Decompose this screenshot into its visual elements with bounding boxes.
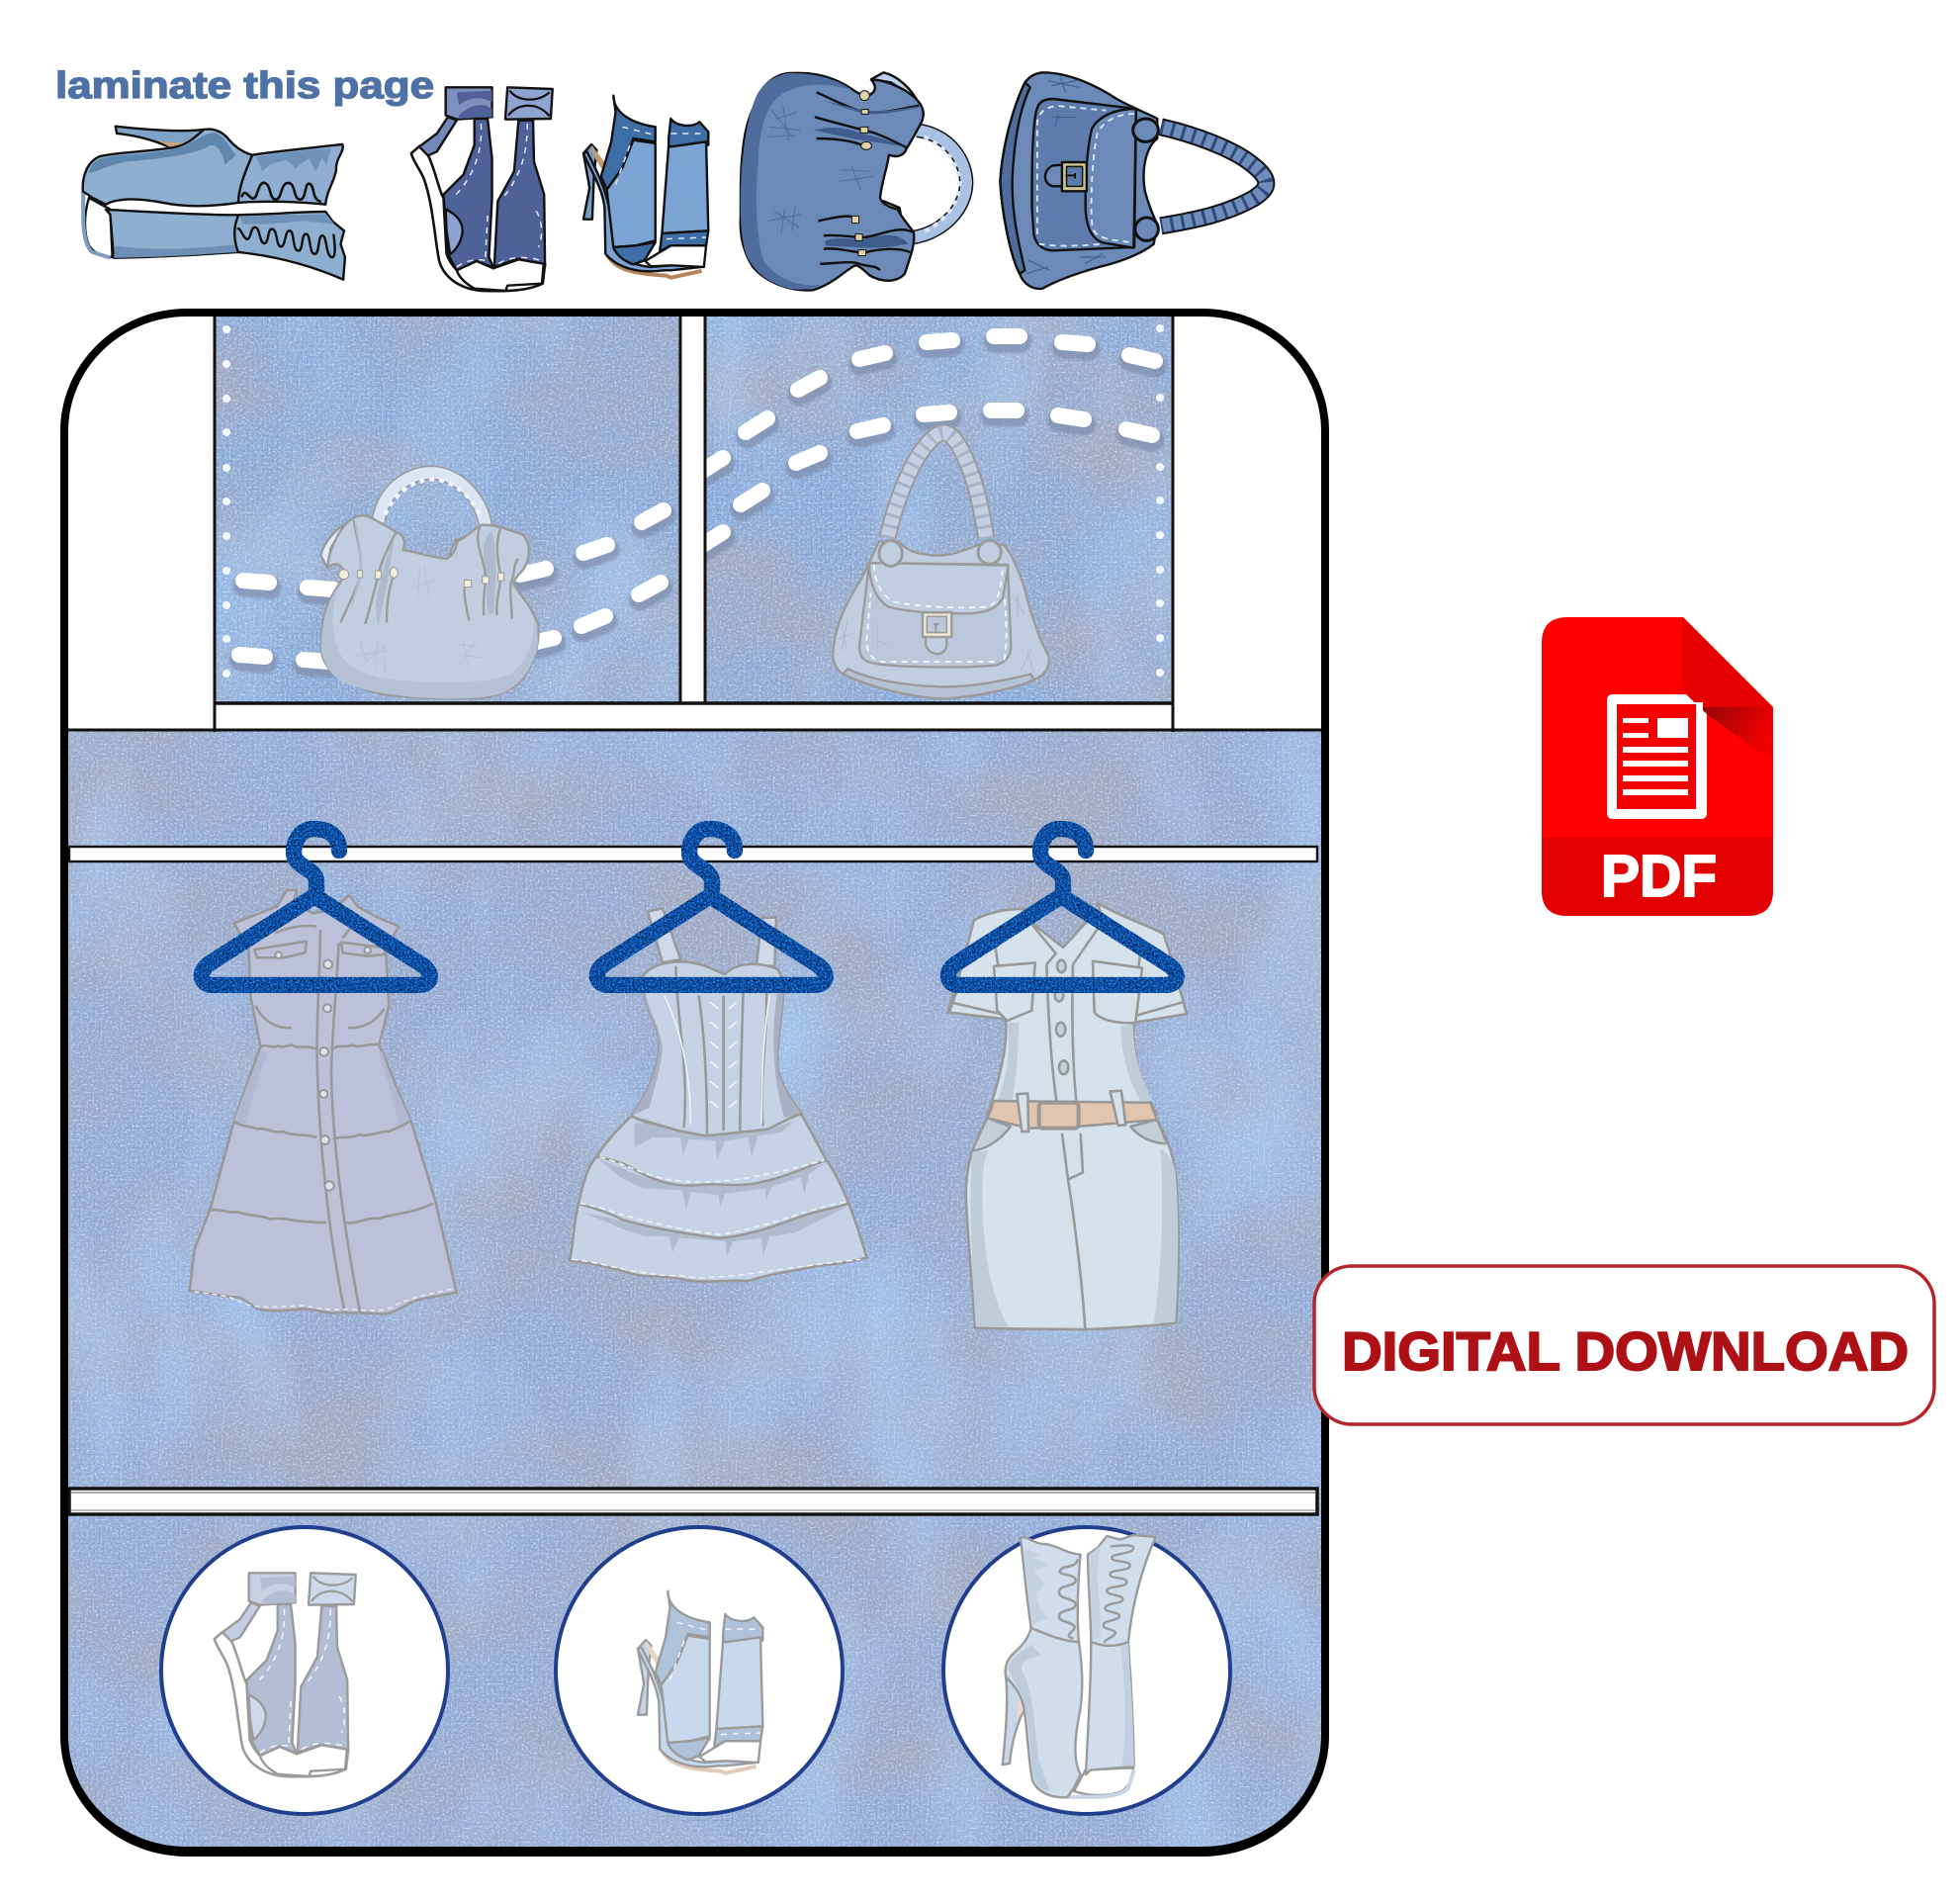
circle left with faded open-toe shoes <box>161 1527 448 1814</box>
panel: top right denim shelf <box>706 315 1173 703</box>
panel: top left denim shelf <box>215 315 679 703</box>
rail two <box>69 1489 1317 1514</box>
icon: full colour heeled sandals <box>583 96 708 278</box>
dress one: button-front tiered dress <box>190 890 457 1314</box>
hanger two <box>597 829 826 985</box>
hanger one <box>202 829 430 985</box>
PDF label: PDF <box>1601 844 1717 909</box>
rivet dots along shelf edges <box>223 324 1164 678</box>
panel: denim wall lower closet <box>64 730 1325 1858</box>
icon: full colour ruched handbag <box>741 72 966 291</box>
faded ruched handbag on shelf <box>320 473 539 698</box>
panel: closet frame <box>60 309 1329 1858</box>
circle right with faded boots <box>943 1527 1230 1814</box>
circle middle with faded sandals <box>556 1527 843 1814</box>
icon: PDF file <box>1542 617 1773 916</box>
dress three: belted shirt dress <box>947 903 1187 1329</box>
rail one <box>69 847 1317 861</box>
shelf divider <box>679 309 706 708</box>
hanger three <box>948 829 1177 985</box>
faded buckle handbag on shelf <box>833 433 1049 699</box>
dress two: corset tiered dress <box>570 908 867 1282</box>
callout: digital download <box>1314 1266 1934 1424</box>
stitching across the top shelves <box>239 336 1156 667</box>
callout text: DIGITAL DOWNLOAD <box>1342 1320 1909 1382</box>
shelf ledge <box>68 317 1321 732</box>
icon: full colour boots <box>83 127 345 280</box>
icon: full colour open-toe shoes <box>411 87 553 291</box>
frame outline <box>60 309 1329 1857</box>
icon: full colour buckle handbag <box>1000 72 1266 289</box>
heading: laminate this page: laminate this page <box>55 65 434 107</box>
